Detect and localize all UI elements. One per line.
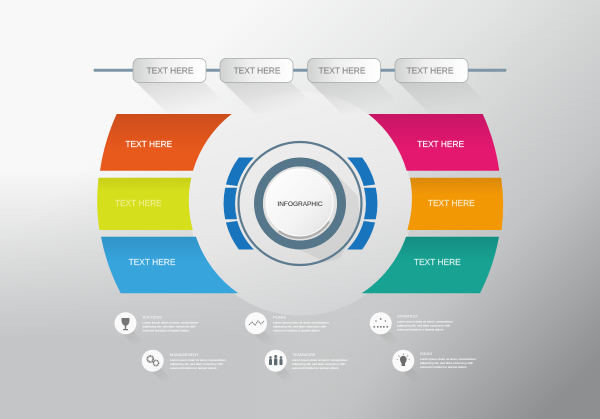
panel: pink: TEXT HERE <box>417 139 465 149</box>
item: management: Lorem ipsum dolor sit amet, consectetuer <box>170 358 226 362</box>
tab 2 <box>220 58 293 82</box>
item: success: SUCCESS <box>142 314 162 320</box>
item: management: adipiscing elit, sed diam nonummy nibh <box>170 362 223 366</box>
panel: lime <box>97 178 193 230</box>
item: success <box>114 312 198 348</box>
item: ideas: adipiscing elit, sed diam nonummy nibh <box>420 361 473 365</box>
item: plans: adipiscing elit, sed diam nonummy nibh <box>273 325 326 329</box>
item: strategy: Lorem ipsum dolor sit amet, consectetuer <box>397 320 453 324</box>
item: plans: euismod tincidunt ut laoreet dolore <box>273 329 320 333</box>
ring long shadow <box>268 171 360 262</box>
panel: teal <box>362 237 499 293</box>
inner disc with label: INFOGRAPHIC <box>277 201 323 208</box>
item: ideas: IDEAS <box>420 351 432 356</box>
panel: amber <box>407 178 503 230</box>
item: management <box>142 350 226 385</box>
tab 2: TEXT HERE <box>234 66 281 76</box>
item: success: Lorem ipsum dolor sit amet, consectetuer <box>142 320 198 324</box>
outer thin ring <box>238 142 362 265</box>
panel: orange: TEXT HERE <box>125 139 173 149</box>
item: management: MANAGEMENT <box>170 352 199 357</box>
thick ring <box>258 162 342 245</box>
icon: gears <box>142 350 178 385</box>
tab shadows <box>136 82 498 114</box>
item: strategy: adipiscing elit, sed diam nonummy nibh <box>397 324 450 328</box>
icon: plan diagram <box>245 312 281 348</box>
item: teamwork: euismod tincidunt ut laoreet dolore <box>292 366 339 370</box>
icon: trophy <box>114 312 150 348</box>
tab 3 <box>308 58 380 82</box>
panel: orange <box>100 114 232 171</box>
panel: teal: TEXT HERE <box>414 257 461 267</box>
item: ideas: euismod tincidunt ut laoreet dolore <box>420 365 467 369</box>
tab 3: TEXT HERE <box>319 66 366 76</box>
tab 4 <box>395 58 468 82</box>
panel: amber: TEXT HERE <box>428 198 475 208</box>
item: plans: Lorem ipsum dolor sit amet, consectetuer <box>273 320 329 324</box>
timeline <box>95 58 505 114</box>
tab 4: TEXT HERE <box>407 66 454 76</box>
tab 1: TEXT HERE <box>147 66 194 76</box>
panel: pink <box>368 114 499 171</box>
tab 1 <box>133 58 206 82</box>
item: teamwork: adipiscing elit, sed diam nonummy nibh <box>292 362 345 366</box>
item: strategy <box>370 312 453 348</box>
item: success: euismod tincidunt ut laoreet dolore <box>142 329 189 333</box>
item: teamwork: TEAMWORK <box>292 352 316 357</box>
item: teamwork: Lorem ipsum dolor sit amet, consectetuer <box>292 358 348 362</box>
icon: light bulb <box>392 350 429 385</box>
item: teamwork <box>265 350 348 385</box>
item: success: adipiscing elit, sed diam nonummy nibh <box>142 325 196 329</box>
item: plans <box>245 312 329 348</box>
panel: blue <box>101 237 238 293</box>
blue arc segments <box>224 158 377 250</box>
item: management: euismod tincidunt ut laoreet dolore <box>170 366 217 370</box>
panel: blue: TEXT HERE <box>129 257 176 267</box>
icon: strategy nodes <box>370 312 406 348</box>
central ring graphic <box>238 142 362 265</box>
panel: lime: TEXT HERE <box>115 198 162 208</box>
item: ideas: Lorem ipsum dolor sit amet, consectetuer <box>420 357 476 361</box>
item: ideas <box>392 350 476 385</box>
large central disc <box>188 92 412 316</box>
timeline line <box>95 69 505 72</box>
item: strategy: STRATEGY <box>397 314 419 318</box>
icon: people <box>265 350 301 385</box>
item: strategy: euismod tincidunt ut laoreet dolore <box>397 328 444 332</box>
item: plans: PLANS <box>273 314 286 320</box>
